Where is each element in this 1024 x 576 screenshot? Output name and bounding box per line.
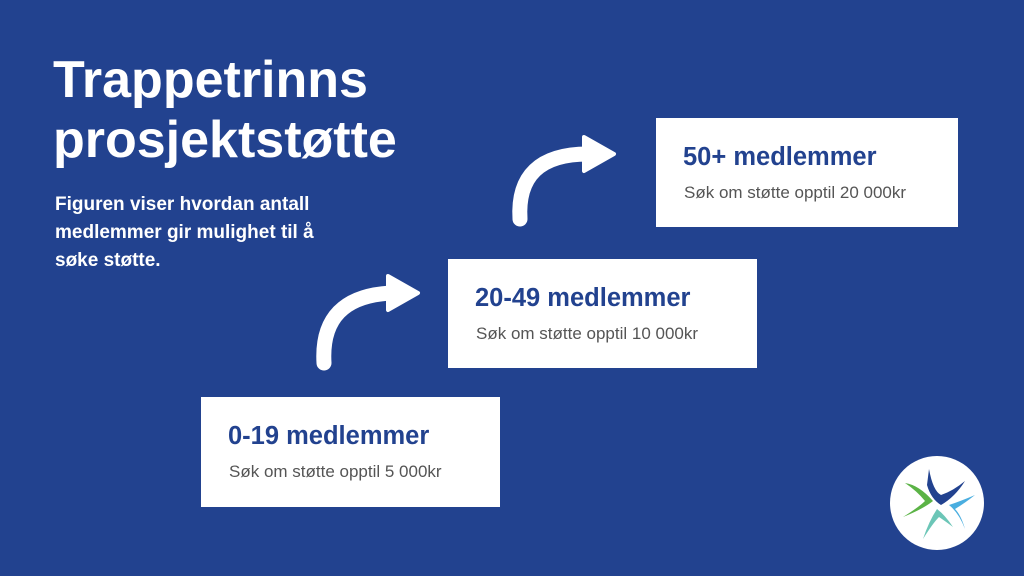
- logo: [890, 456, 984, 550]
- title: [53, 51, 397, 169]
- box: 50+: Søk om støtte opptil 20 000kr: [684, 183, 906, 202]
- title: Trappetrinns: [53, 51, 368, 109]
- box: 0-19: Søk om støtte opptil 5 000kr: [229, 462, 442, 481]
- box: 20-49: Søk om støtte opptil 10 000kr: [476, 324, 698, 343]
- box: 50+: 50+ medlemmer: [683, 143, 876, 171]
- box: 20-49: [448, 259, 757, 368]
- box: 0-19: 0-19 medlemmer: [228, 422, 429, 450]
- subtitle: Figuren viser hvordan antall medlemmer gir mulighet til å søke støtte.: [55, 194, 314, 271]
- box: 20-49: 20-49 medlemmer: [475, 284, 690, 312]
- box: 0-19: [201, 397, 500, 507]
- arrow: upper: [512, 135, 616, 226]
- box: 50+: [656, 118, 958, 227]
- title: prosjektstøtte: [53, 111, 397, 169]
- arrow: lower: [316, 274, 420, 370]
